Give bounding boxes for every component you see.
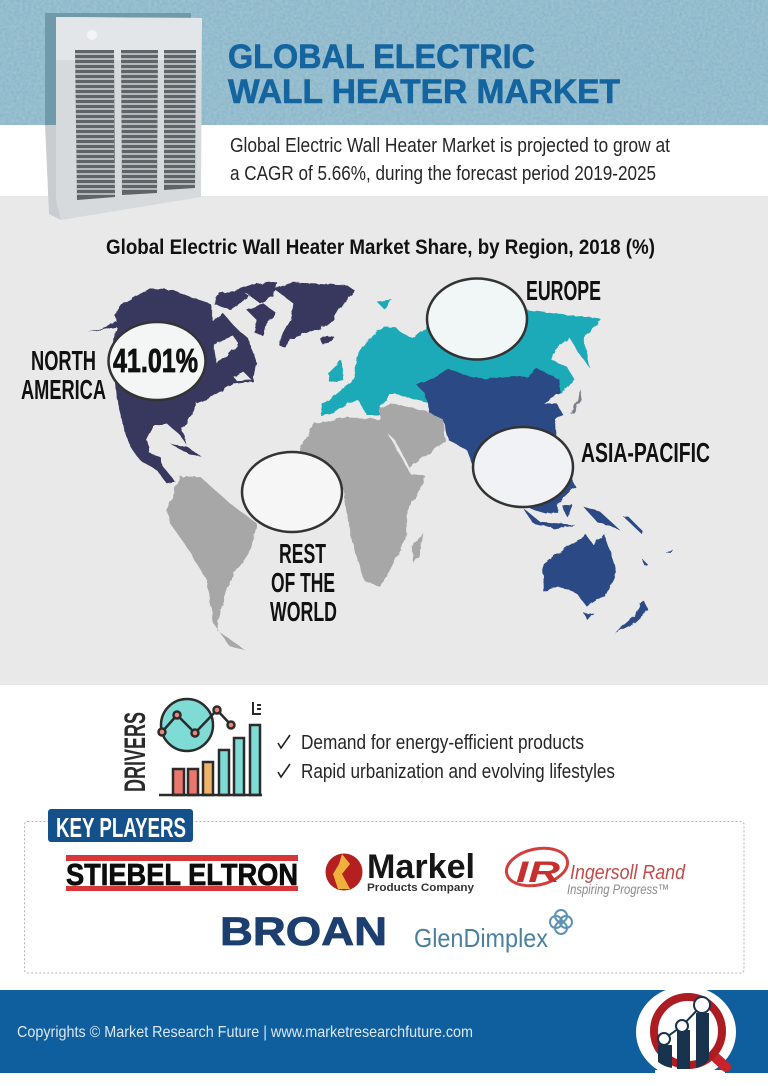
- logo: Ingersoll Rand: IR: [516, 856, 560, 889]
- icon: Market Research Future logo: [636, 986, 736, 1078]
- logo: Markel: Markel: [367, 848, 475, 886]
- icon: drivers growth chart: [158, 699, 262, 795]
- label: Asia-Pacific: ASIA-PACIFIC: [581, 437, 710, 468]
- icon: electric wall heater: [45, 13, 202, 220]
- logo: Ingersoll Rand: [503, 843, 686, 897]
- label: Rest of the World: [270, 538, 337, 627]
- label: North America: AMERICA: [21, 374, 106, 405]
- logo: Glen Dimplex: GlenDimplex: [414, 923, 548, 953]
- logo: Markel: [326, 848, 475, 894]
- logo: Stiebel Eltron: STIEBEL ELTRON: [66, 857, 298, 892]
- callout: Rest of the World bubble: [242, 452, 342, 532]
- subtitle text: a CAGR of 5.66%, during the forecast period 2019-2025: [230, 163, 656, 185]
- footer copyright: Copyrights © Market Research Future | www.marketresearchfuture.com: [17, 1024, 473, 1041]
- footer band: [0, 990, 768, 1073]
- title: [228, 38, 620, 111]
- map: Asia-Pacific: [417, 368, 673, 633]
- logo: Ingersoll Rand: Inspiring Progress™: [567, 881, 669, 897]
- label: Rest of the World: REST: [279, 538, 326, 569]
- callout: North America share: [108, 322, 206, 400]
- key players heading: [48, 809, 193, 843]
- label: Europe: EUROPE: [526, 275, 601, 306]
- map heading: Global Electric Wall Heater Market Share, by Region, 2018 (%): [106, 236, 655, 259]
- label: Rest of the World: OF THE: [271, 567, 335, 598]
- logo: Broan: BROAN: [220, 910, 387, 954]
- logo: Markel: Products Company: [367, 882, 475, 894]
- callout: Asia-Pacific bubble: [473, 427, 573, 507]
- driver: energy-efficient products: Demand for energy-efficient products: [301, 732, 584, 754]
- callout: North America share: 41.01%: [113, 342, 198, 379]
- label: North America: NORTH: [31, 345, 96, 376]
- label: North America: [21, 345, 106, 405]
- label: drivers: DRIVERS: [119, 712, 152, 792]
- title: WALL HEATER MARKET: [228, 73, 620, 111]
- key players heading: KEY PLAYERS: [56, 812, 186, 843]
- panel: key players: [24, 809, 744, 973]
- subtitle text: [230, 135, 670, 185]
- subtitle text: Global Electric Wall Heater Market is projected to grow at: [230, 135, 670, 157]
- driver: urbanization: Rapid urbanization and evolving lifestyles: [301, 761, 615, 783]
- map: Europe and Russia: [320, 299, 600, 415]
- callout: Europe bubble: [427, 278, 527, 360]
- map: North America: [87, 282, 356, 483]
- driver list: [278, 732, 615, 783]
- logo: Ingersoll Rand: Ingersoll Rand: [570, 862, 686, 884]
- header banner: [0, 0, 768, 125]
- title: GLOBAL ELECTRIC: [228, 38, 535, 76]
- map panel background: [0, 196, 768, 685]
- map: Middle East and Madagascar: [380, 403, 445, 563]
- map: South America and Africa: [167, 417, 427, 650]
- logo: Glen Dimplex: [414, 910, 572, 953]
- label: Rest of the World: WORLD: [270, 596, 337, 627]
- world map: [87, 282, 673, 650]
